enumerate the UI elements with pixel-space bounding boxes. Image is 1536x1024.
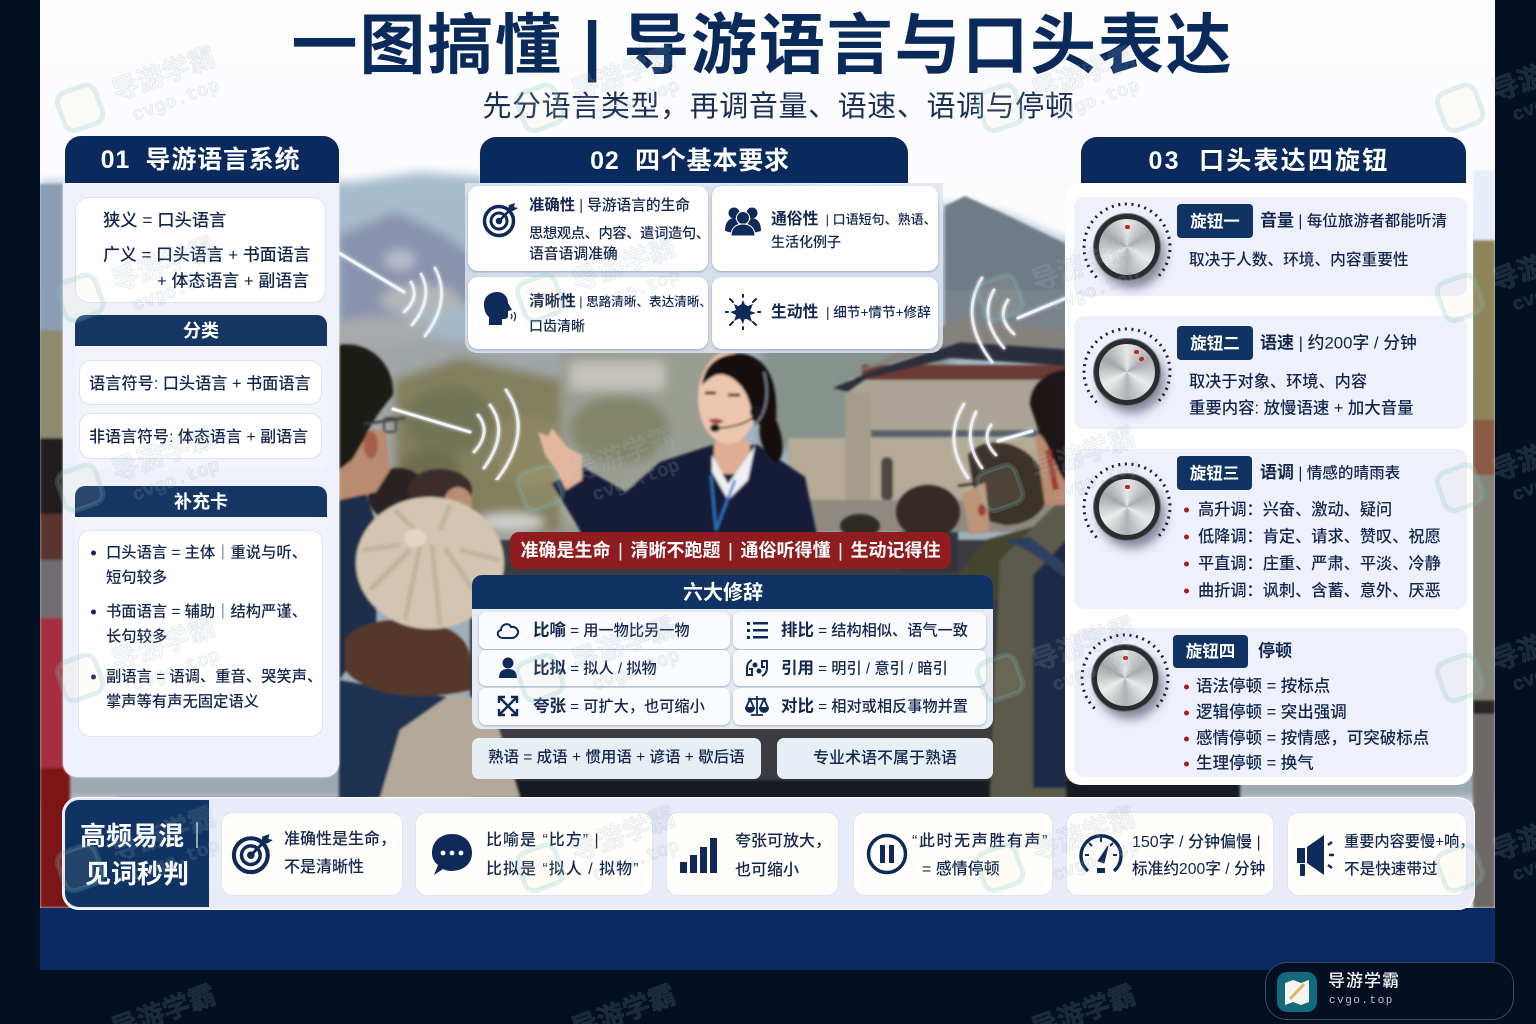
card: 准确性 vs 清晰性: [221, 812, 403, 896]
card: 生动性: 生动性 | 细节+情节+修辞: [771, 304, 931, 321]
card: 感情停顿: = 感情停顿: [922, 861, 1000, 878]
watermarks: 导游学霸: [108, 802, 220, 867]
heading 03: 03 口头表达四旋钮: [1149, 147, 1389, 175]
card: 旋钮一 音量: [1074, 197, 1467, 296]
card: 语速标准: 150字 / 分钟偏慢 |: [1132, 834, 1261, 851]
item: 夸张: 夸张 = 可扩大，也可缩小: [533, 698, 705, 716]
watermarks: 导游学霸: [1028, 422, 1140, 487]
card: 旋钮一 音量: 取决于人数、环境、内容重要性: [1189, 252, 1409, 269]
item: 引用: 引用 = 明引 / 意引 / 暗引: [781, 660, 948, 678]
watermarks: cvgo.top: [1049, 455, 1143, 507]
card: 旋钮三 语调: 高升调：兴奋、激动、疑问: [1198, 501, 1392, 519]
mountains: [40, 172, 1495, 800]
small center heads: [896, 485, 960, 539]
definition card: + 体态语言 + 副语言: [157, 271, 309, 290]
icon: signal bars: [680, 838, 717, 873]
banner: 四句口诀: |: [728, 541, 733, 561]
panel body: [1065, 183, 1473, 785]
panel: 01 导游语言系统: [61, 136, 341, 778]
heading 六大修辞: 六大修辞: [683, 582, 763, 604]
card: 准确性 vs 清晰性: 准确性是生命，: [284, 831, 396, 848]
item: 对比: [733, 688, 986, 725]
watermarks: cvgo.top: [129, 645, 223, 697]
icon: speedometer: [1079, 834, 1123, 873]
watermarks: 导游学霸: [108, 422, 220, 487]
card: 夸张: 也可缩小: [735, 862, 799, 879]
icon: list: [747, 622, 768, 639]
watermarks: cvgo.top: [1049, 645, 1143, 697]
tag: [1177, 326, 1253, 360]
definition card: 广义 = 口头语言 + 书面语言: [103, 245, 310, 264]
item: 排比: 排比 = 结构相似、语气一致: [781, 622, 968, 640]
crowd: [118, 344, 1240, 910]
card: 旋钮二 语速: [1074, 316, 1467, 429]
card: 比喻 vs 比拟: 比喻是 “比方” |: [486, 832, 600, 849]
icon: target: [482, 203, 518, 238]
tag: 旋钮四: [1186, 643, 1235, 661]
card: 重要内容: 重要内容要慢+响，: [1344, 833, 1474, 850]
watermarks: 导游学霸: [568, 42, 680, 107]
icon: map logo: [1277, 972, 1317, 1012]
list: 补充内容: 掌声等有声无固定语义: [106, 693, 259, 710]
watermarks: cvgo.top: [1049, 75, 1143, 127]
watermarks: 导游学霸: [108, 612, 220, 677]
heading 分类: 分类: [183, 321, 219, 341]
right man 1: [968, 442, 1048, 525]
banner: 四句口诀: |: [618, 541, 623, 561]
list: 补充内容: 长句较多: [106, 628, 167, 645]
item: 比拟: [479, 650, 730, 686]
icon: person: [499, 658, 517, 678]
subtitle: 先分语言类型，再调音量、语速、语调与停顿: [482, 91, 1074, 123]
card: 语速标准: [1066, 812, 1274, 896]
heading 补充卡: 补充卡: [174, 492, 228, 512]
watermarks: cvgo.top: [129, 265, 223, 317]
banner: 四句口诀: |: [838, 541, 843, 561]
watermarks: cvgo.top: [589, 455, 683, 507]
panel: 03 口头表达四旋钮: [1065, 137, 1473, 785]
card: 清晰性: 清晰性 | 思路清晰、表达清晰、: [529, 293, 712, 310]
card: 准确性: 语音语调准确: [529, 247, 618, 263]
beige hat: [356, 497, 504, 629]
watermarks: 导游学霸: [108, 42, 220, 107]
tag: 旋钮一: [1190, 213, 1240, 231]
card: 旋钮三 语调: 平直调：庄重、严肃、平淡、冷静: [1198, 555, 1441, 573]
card: 旋钮三 语调: 曲折调：讽刺、含蓄、意外、厌恶: [1198, 582, 1441, 600]
icon: scales: [745, 696, 769, 716]
note: 专业术语: [777, 738, 993, 779]
card: 比喻 vs 比拟: 比拟是 “拟人 / 拟物”: [486, 861, 639, 878]
item: 夸张: [479, 688, 730, 725]
list: 补充内容: 口头语言 = 主体｜重说与听、: [106, 544, 307, 561]
card: 生动性: [712, 277, 938, 349]
card: 旋钮二 语速: 取决于对象、环境、内容: [1189, 373, 1367, 391]
heading: 高频易混: [65, 800, 209, 907]
watermarks: 导游学霸: [1028, 42, 1140, 107]
watermarks: cvgo.top: [1049, 835, 1143, 887]
left man: [339, 490, 378, 680]
watermarks: 导游学霸: [568, 422, 680, 487]
card: 旋钮三 语调: 语调 | 情感的晴雨表: [1260, 463, 1400, 482]
icon: megaphone: [1297, 835, 1334, 876]
card: 旋钮二 语速: 语速 | 约200字 / 分钟: [1260, 333, 1417, 352]
card: 旋钮四 停顿: [1074, 628, 1467, 777]
panel: 02 四个基本要求: [465, 137, 943, 353]
watermarks: 导游学霸: [568, 802, 680, 867]
card: 旋钮四 停顿: 逻辑停顿 = 突出强调: [1196, 704, 1347, 722]
left strip: [40, 184, 70, 908]
heads behind: [368, 468, 428, 522]
tag: [1177, 456, 1252, 490]
right man 2: [990, 495, 1066, 800]
card: 旋钮四 停顿: 生理停顿 = 换气: [1196, 755, 1314, 773]
card: 旋钮三 语调: 低降调：肯定、请求、赞叹、祝愿: [1198, 528, 1441, 546]
panel: 六大修辞: [472, 575, 993, 729]
heading 01: [65, 136, 339, 183]
brand badge: [1265, 962, 1514, 1020]
definition card: [75, 197, 326, 303]
sub-panel: 补充卡: [75, 486, 327, 738]
watermarks: 导游学霸: [1028, 612, 1140, 677]
list: 补充内容: 短句较多: [106, 569, 167, 586]
note: 专业术语: 专业术语不属于熟语: [813, 750, 957, 767]
card: 非语言符号: 非语言符号: 体态语言 + 副语言: [89, 429, 308, 446]
brand badge: cvgo.top: [1329, 995, 1394, 1007]
card: 感情停顿: [853, 812, 1053, 896]
list: 补充内容: [78, 530, 323, 737]
heading 02: [480, 137, 908, 183]
definition card: 狭义 = 口头语言: [103, 210, 226, 230]
icon: chat bubble: [432, 834, 472, 875]
right strip: [1473, 170, 1495, 908]
card: 旋钮四 停顿: 感情停顿 = 按情感，可突破标点: [1196, 730, 1429, 748]
banner: 四句口诀: [510, 532, 951, 569]
card: 重要内容: 不是快速带过: [1344, 861, 1438, 878]
item: 比拟: 比拟 = 拟人 / 拟物: [533, 660, 657, 678]
heading: 高频易混: 见词秒判: [85, 859, 189, 889]
watermarks: 导游学霸: [568, 612, 680, 677]
card: 夸张: [666, 812, 839, 896]
card: 语言符号: 语言符号: 口头语言 + 书面语言: [89, 375, 311, 393]
card: 语速标准: 标准约200字 / 分钟: [1132, 861, 1265, 878]
watermarks: cvgo.top: [129, 455, 223, 507]
card: 通俗性: 通俗性 | 口语短句、熟语、: [771, 211, 937, 228]
brand badge: 导游学霸: [1328, 971, 1400, 990]
card: 旋钮一 音量: 音量 | 每位旅游者都能听清: [1260, 211, 1447, 230]
heading 02: 02 四个基本要求: [590, 147, 790, 175]
card: 准确性: [468, 186, 708, 271]
icon: pause: [866, 834, 908, 874]
watermarks: 导游学霸: [1028, 802, 1140, 867]
heading 补充卡: [75, 486, 327, 517]
list: 补充内容: 书面语言 = 辅助｜结构严谨、: [106, 603, 307, 620]
sound-wave connectors: [339, 250, 1065, 482]
icon: knob three: [1082, 462, 1172, 554]
icon: expand arrows: [498, 696, 518, 716]
watermarks: cvgo.top: [589, 835, 683, 887]
watermarks: cvgo.top: [589, 265, 683, 317]
watermarks: 导游学霸: [108, 232, 220, 297]
card: 旋钮三 语调: [1074, 449, 1467, 609]
icon: speaking head: [484, 292, 516, 325]
banner: 四句口诀: 准确是生命 清晰不跑题 通俗听得懂 生动记得住: [520, 541, 940, 561]
watermarks: 导游学霸: [568, 232, 680, 297]
heading 分类: [75, 315, 327, 346]
icon: knob four: [1080, 634, 1170, 726]
title: 一图搞懂 | 导游语言与口头表达: [292, 8, 1233, 82]
card: 准确性: 思想观点、内容、遣词造句、: [529, 226, 710, 242]
heading: 高频易混: 高频易混｜: [80, 821, 210, 851]
card: 清晰性: [468, 277, 708, 349]
card: 语言符号: [79, 360, 322, 405]
card: 准确性 vs 清晰性: 不是清晰性: [284, 859, 364, 876]
icon: knob two: [1082, 328, 1172, 420]
card: 清晰性: 口齿清晰: [529, 318, 585, 334]
icon: quote: [746, 659, 768, 677]
list: 补充内容: 副语言 = 语调、重音、哭笑声、: [106, 668, 322, 685]
heading 六大修辞: [472, 575, 993, 609]
tag: [1173, 635, 1248, 668]
icon: target: [232, 834, 273, 874]
card: 准确性: 准确性 | 导游语言的生命: [529, 197, 690, 214]
card: 通俗性: [712, 186, 938, 271]
card: 旋钮二 语速: 重要内容: 放慢语速 + 加大音量: [1189, 400, 1413, 418]
note: 熟语构成: 熟语 = 成语 + 惯用语 + 谚语 + 歇后语: [488, 749, 745, 766]
watermarks: cvgo.top: [1049, 265, 1143, 317]
icon: people: [725, 208, 761, 236]
panel: 高频易混 见词秒判: [63, 798, 1474, 909]
watermarks: cvgo.top: [129, 75, 223, 127]
tour guide: [538, 352, 818, 540]
item: 引用: [733, 650, 986, 686]
icon: cloud: [496, 623, 520, 639]
tag: [1177, 204, 1253, 238]
tower building: [788, 318, 1068, 532]
card: 感情停顿: “此时无声胜有声”: [912, 833, 1049, 850]
watermarks: cvgo.top: [589, 75, 683, 127]
navy base band: [40, 908, 1495, 970]
watermarks: cvgo.top: [589, 645, 683, 697]
note: 熟语构成: [472, 738, 761, 779]
backpack woman: [339, 680, 470, 798]
card: 夸张: 夸张可放大，: [735, 833, 831, 850]
icon: sparkle burst: [725, 294, 761, 330]
heading 01: 01 导游语言系统: [101, 146, 300, 174]
panel body: [63, 183, 339, 777]
watermarks: 导游学霸: [1028, 232, 1140, 297]
icon: knob one: [1082, 202, 1172, 294]
watermarks: cvgo.top: [129, 835, 223, 887]
item: 对比: 对比 = 相对或相反事物并置: [781, 698, 968, 716]
heading 03: [1081, 137, 1466, 183]
card: 旋钮四 停顿: 语法停顿 = 按标点: [1196, 678, 1330, 696]
card grid backing: [465, 183, 943, 353]
card: 非语言符号: [79, 413, 322, 459]
tag: 旋钮三: [1190, 465, 1239, 483]
tag: 旋钮二: [1190, 335, 1240, 353]
item: 排比: [733, 612, 986, 649]
card: 旋钮四 停顿: 停顿: [1258, 641, 1292, 660]
item: 比喻: 比喻 = 用一物比另一物: [533, 622, 690, 640]
card: 通俗性: 生活化例子: [771, 234, 841, 250]
item: 比喻: [479, 612, 730, 649]
card: 重要内容: [1287, 812, 1467, 896]
card: 比喻 vs 比拟: [415, 812, 653, 896]
sub-panel: 分类: [75, 315, 327, 470]
